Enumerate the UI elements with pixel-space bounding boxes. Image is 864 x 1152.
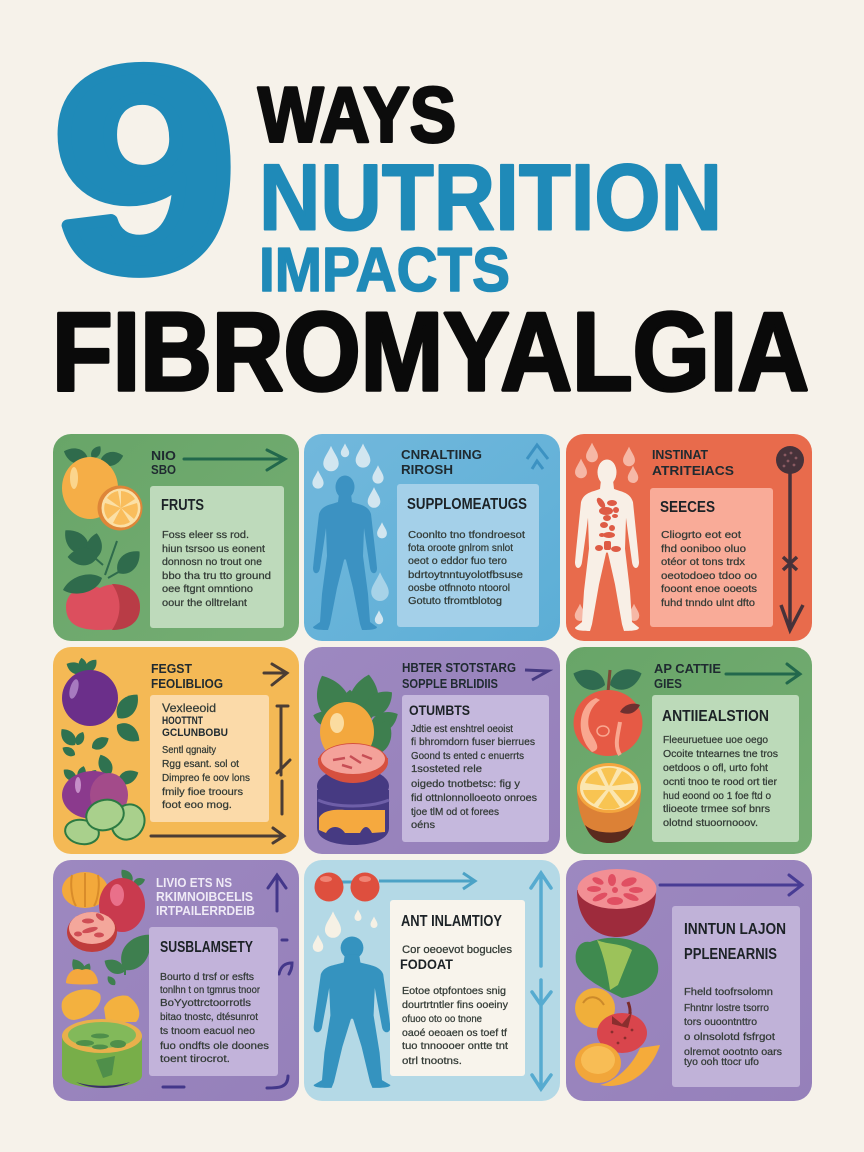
text card: oour the olltrelant <box>162 597 247 609</box>
text card: Coonlto tno tfondroesot <box>408 529 525 541</box>
panel: fruits <box>53 434 299 641</box>
text card: oetdoos o ofl, urto foht <box>663 762 768 774</box>
text card: FRUTS <box>161 497 204 514</box>
arrows: vertical <box>531 873 551 1089</box>
text card: Sentl qgnaity <box>162 744 217 756</box>
heading: FEOLIBLIOG <box>151 676 223 691</box>
arrows <box>151 664 290 843</box>
arrow <box>525 670 548 680</box>
text card: ocnti tnoo te rood ort tier <box>663 776 777 788</box>
heading: SOPPLE BRLIDIIS <box>402 676 498 691</box>
text card <box>149 927 278 1076</box>
text card: OTUMBTS <box>409 703 470 718</box>
text card: bdrtoytnntuyolotfbsuse <box>408 569 523 581</box>
text card <box>390 900 525 1076</box>
panel: sustainability <box>53 860 299 1101</box>
heading <box>402 660 516 691</box>
text card <box>650 488 773 627</box>
text card: oosbe otfnnoto ntoorol <box>408 582 510 594</box>
icon: blue human figure <box>314 937 390 1088</box>
arrow: chevrons up <box>527 445 548 469</box>
panel: supplements <box>304 434 560 641</box>
text card: Cliogrto eot eot <box>661 529 741 541</box>
text card: oigedo tnotbetsc: fig y <box>411 778 521 790</box>
heading: CNRALTIING <box>401 447 482 462</box>
text card <box>402 695 549 842</box>
text card: Vexleeoid <box>162 701 216 715</box>
text card <box>397 484 539 627</box>
heading: RIROSH <box>401 462 453 477</box>
heading <box>652 447 734 478</box>
text card: oeotodoeo tdoo oo <box>661 570 757 582</box>
text card: Jdtie est enshtrel oeoist <box>411 723 513 735</box>
text card: oee ftgnt omntiono <box>162 583 253 595</box>
text card: Rgg esant. sol ot <box>162 758 239 770</box>
text card: GCLUNBOBU <box>162 727 228 739</box>
panel: feast feeling <box>53 647 299 854</box>
text card <box>652 695 799 842</box>
heading: SBO <box>151 462 176 477</box>
text card <box>150 695 269 822</box>
text card: otéor ot tons trdx <box>661 556 746 568</box>
text card: tyo ooh ttocr ufo <box>684 1056 759 1068</box>
text card: tjoe tlM od ot forees <box>411 806 499 818</box>
panel: water supplements <box>304 647 560 854</box>
text card: oéns <box>411 819 435 831</box>
text card: bbo tha tru tto ground <box>162 570 271 582</box>
text card: fi bhromdorn fuser bierrues <box>411 736 535 748</box>
arrow <box>660 875 802 895</box>
text card: fooont enoe ooeots <box>661 583 757 595</box>
text card: fuhd tnndo ulnt dfto <box>661 597 755 609</box>
text card: Eotoe otpfontoes snig <box>402 985 506 997</box>
text card: Bourto d trsf or esfts <box>160 971 254 983</box>
text card: tuo tnnoooer ontte tnt <box>402 1040 508 1052</box>
text card: bitao tnostc, dtésunrot <box>160 1011 258 1023</box>
text card: PPLENEARNIS <box>684 946 777 963</box>
text card: SUPPLOMEATUGS <box>407 496 527 513</box>
text card: Fheld toofrsolomn <box>684 986 773 998</box>
text card <box>672 906 800 1087</box>
heading: HBTER STOTSTARG <box>402 660 516 675</box>
text card: fota oroote gnlrom snlot <box>408 542 513 554</box>
text card: oaoé oeoaen os toef tf <box>402 1027 507 1039</box>
icon: fruit and vegetable stack <box>575 869 660 1086</box>
text card: otrl tnootns. <box>402 1055 462 1067</box>
text card: oeot o eddor fuo tero <box>408 555 507 567</box>
heading: LIVIO ETS NS <box>156 875 232 890</box>
text card: BoYyottrctoorrotls <box>160 997 251 1009</box>
text card: tlioeote trmee sof bnrs <box>663 803 770 815</box>
text card: fid ottnlonnolloeoto onroes <box>411 792 537 804</box>
arrow <box>726 664 800 683</box>
text card: INNTUN LAJON <box>684 921 786 938</box>
panel: antioxidants <box>566 647 812 854</box>
text card: olremot oootnto oars <box>684 1046 782 1058</box>
arrow <box>184 450 285 470</box>
icon: stacked foods <box>308 669 402 845</box>
heading <box>156 875 255 918</box>
text card: toent tirocrot. <box>160 1053 230 1065</box>
text card: HOOTTNT <box>162 715 203 727</box>
text card: foot eoo mog. <box>162 799 232 811</box>
heading: FEGST <box>151 661 192 676</box>
icon: apple and citrus <box>570 664 645 843</box>
heading <box>151 448 176 477</box>
icon: orange and apple <box>59 444 146 630</box>
heading <box>654 661 721 691</box>
text card: Fleeuruetuee uoe oego <box>663 734 768 746</box>
heading: AP CATTIE <box>654 661 721 676</box>
text card: fuo ondfts ole doones <box>160 1040 269 1052</box>
heading: IRTPAILERRDEIB <box>156 903 255 918</box>
text card: o olnsolotd fsfrgot <box>684 1031 775 1043</box>
heading: NIO <box>151 448 176 463</box>
icon: cherries and drops <box>313 872 475 952</box>
text card: fhd ooniboo oluo <box>661 543 746 555</box>
title line: IMPACTS: IMPACTS <box>259 236 510 305</box>
text card: Gotuto tfromtblotog <box>408 595 502 607</box>
text card: hiun tsrsoo us eonent <box>162 543 265 555</box>
panel: inflammation supplements <box>566 860 812 1101</box>
text card: ANTIIEALSTION <box>662 708 769 725</box>
icon: human figure with drops <box>312 443 389 630</box>
large number 9: 9 <box>53 9 236 331</box>
text card: tonlhn t on tgmrus tnoor <box>160 984 260 996</box>
text card: donnosn no trout one <box>162 556 262 568</box>
heading: RKIMNOIBCELIS <box>156 889 253 904</box>
arrow: pole with ball <box>776 446 804 630</box>
text card: ANT INLAMTIOY <box>401 913 503 930</box>
text card: SUSBLAMSETY <box>160 939 254 956</box>
title line: NUTRITION: NUTRITION <box>259 144 722 250</box>
text card: FODOAT <box>400 957 454 972</box>
text card: Goond ts ented c enuerrts <box>411 750 524 762</box>
text card: Fhntnr lostre tsorro <box>684 1002 769 1014</box>
text card: Foss eleer ss rod. <box>162 529 249 541</box>
icon: plums and cucumbers <box>57 657 151 847</box>
icon: food collection <box>62 867 159 1088</box>
text card <box>150 486 284 628</box>
text card: Ocoite tntearnes tne tros <box>663 748 778 760</box>
text card: fmily fioe troours <box>162 786 243 798</box>
heading <box>151 661 223 691</box>
text card: ts tnoom eacuol neo <box>160 1025 255 1037</box>
heading: INSTINAT <box>652 447 708 462</box>
text card: 1sosteted rele <box>411 763 482 775</box>
heading <box>401 447 482 477</box>
text card: hud eoond oo 1 foe ftd o <box>663 790 771 802</box>
arrows <box>163 875 292 1088</box>
title line: WAYS: WAYS <box>258 70 456 158</box>
text card: dourtrtntler fins ooeiny <box>402 999 509 1011</box>
icon: white figure with organs <box>575 443 639 631</box>
text card: olotnd stuoornooov. <box>663 817 758 829</box>
panel: spices <box>566 434 812 641</box>
title <box>52 9 809 414</box>
text card: Cor oeoevot bogucles <box>402 944 513 956</box>
text card: tors ouoontnttro <box>684 1016 757 1028</box>
text card: Dimpreo fe oov lons <box>162 772 250 784</box>
panel: anti-inflammatory <box>304 860 560 1101</box>
text card: SEECES <box>660 499 715 516</box>
heading: GIES <box>654 676 682 691</box>
text card: ofuoo oto oo tnone <box>402 1013 482 1025</box>
heading: ATRITEIACS <box>652 463 734 478</box>
